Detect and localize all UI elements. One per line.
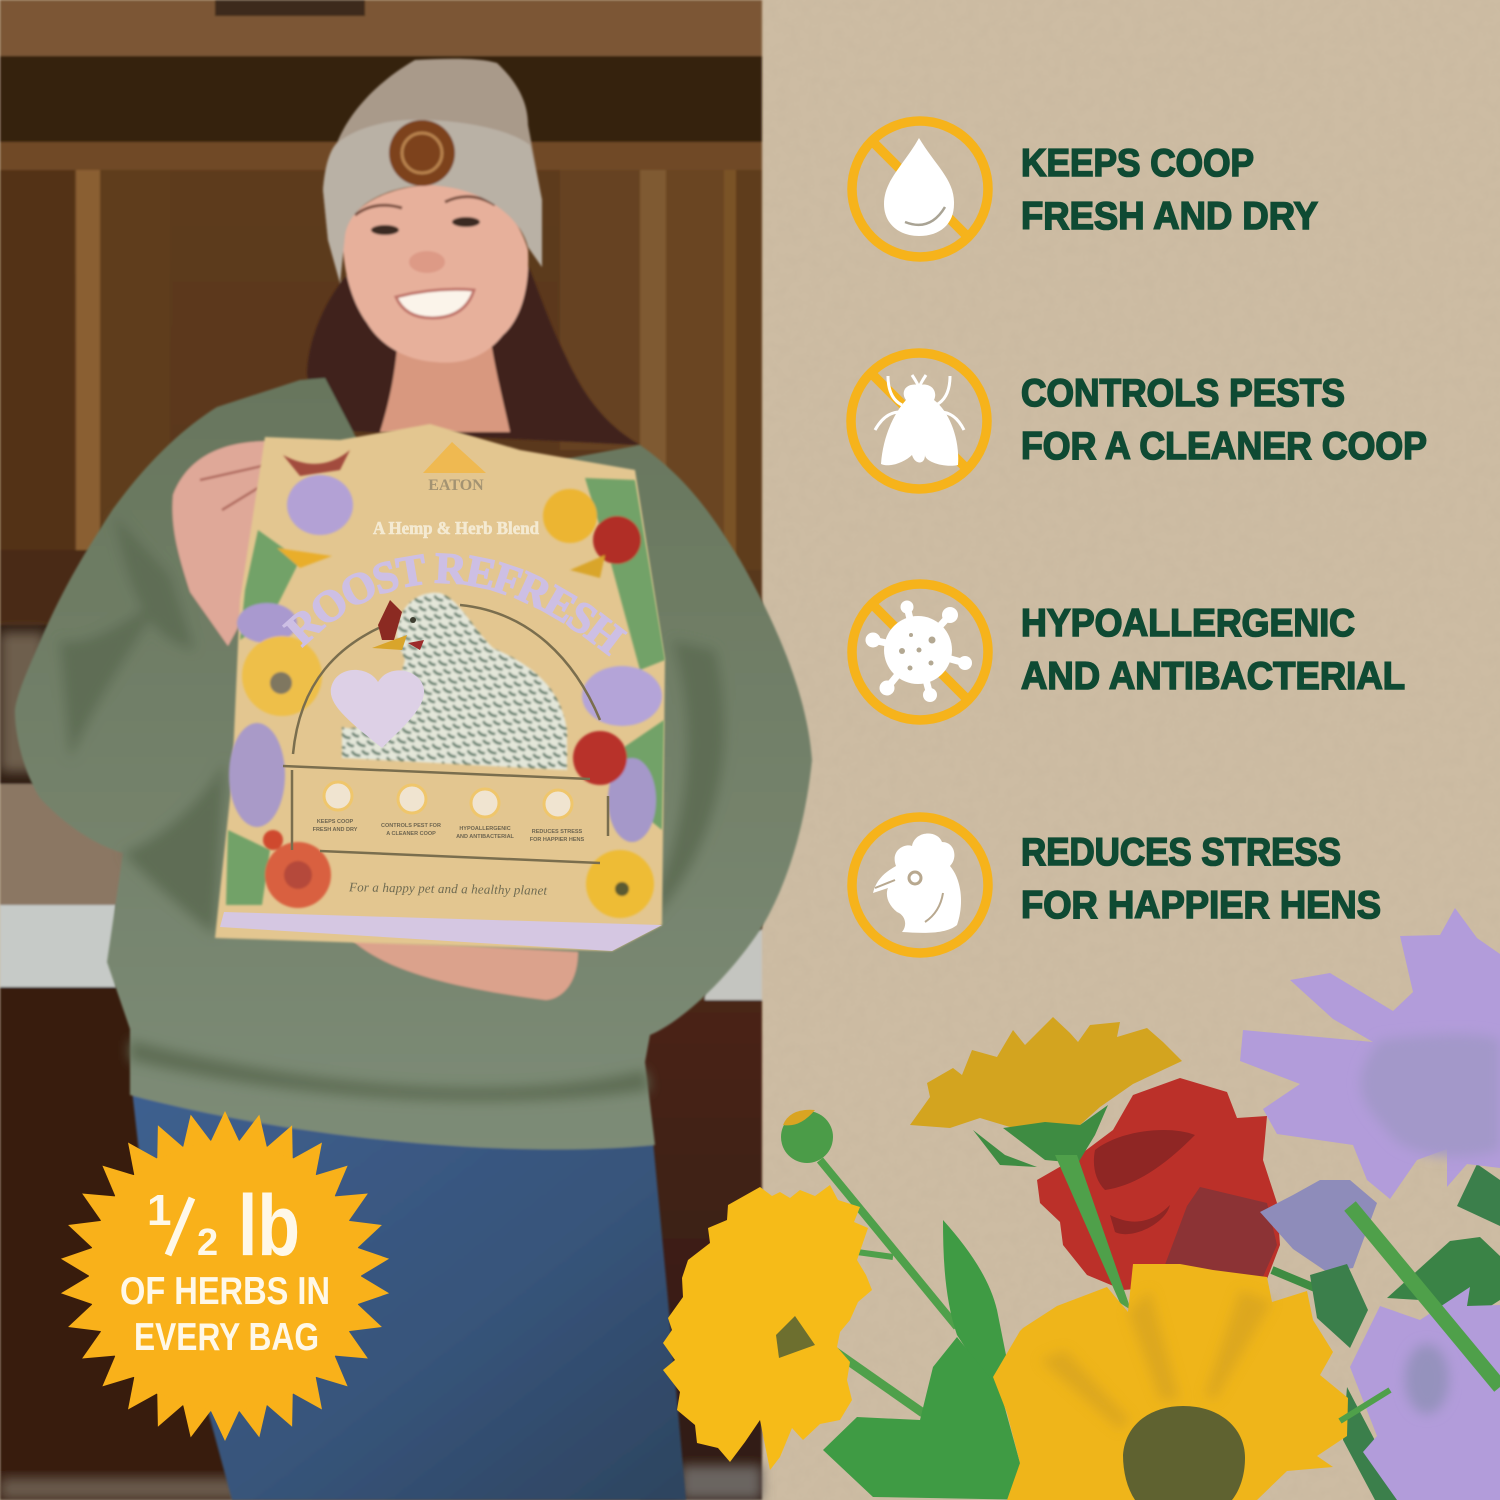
stems over purple — [1340, 1206, 1500, 1421]
bag logo — [423, 442, 486, 473]
benefit: reduces stress — [852, 817, 1381, 953]
bag chicken comb and beak — [372, 600, 424, 650]
hat patch — [389, 120, 455, 186]
bag chicken — [342, 593, 567, 770]
badge text: OF HERBS IN — [120, 1270, 330, 1313]
bag benefit labels: REDUCES STRESS — [532, 829, 583, 835]
text — [1021, 372, 1427, 468]
icon: no fly — [851, 353, 987, 489]
paper panel — [762, 0, 1500, 1500]
yellow flower calyx and stem — [1003, 1105, 1131, 1310]
flower center bottom — [1123, 1406, 1245, 1500]
sweatshirt — [15, 378, 812, 1149]
upper hand — [172, 441, 285, 646]
green bud under purple flower — [1310, 1264, 1368, 1348]
product bag: EATON — [428, 477, 484, 494]
photo: woman holding bag in barn — [0, 0, 814, 1500]
bag benefit labels: A CLEANER COOP — [386, 831, 436, 837]
bag arch — [283, 605, 608, 863]
starburst — [59, 1111, 391, 1441]
product bag — [214, 423, 666, 952]
jeans — [130, 1072, 686, 1500]
purple flower top right — [1240, 908, 1500, 1199]
icon: green bud — [781, 1110, 833, 1163]
bag benefit labels: KEEPS COOP — [317, 819, 354, 825]
yellow flower left — [663, 1185, 872, 1470]
bag benefit labels: CONTROLS PEST FOR — [381, 823, 441, 829]
bag heart — [331, 670, 424, 748]
bag title — [302, 583, 620, 665]
nose — [409, 251, 445, 273]
bag tagline: A Hemp & Herb Blend — [373, 518, 539, 538]
bag side florals — [226, 450, 665, 918]
bag benefit labels: AND ANTIBACTERIAL — [456, 834, 515, 840]
benefit: hypoallergenic — [852, 584, 1405, 720]
stems and leaves — [820, 1130, 1500, 1500]
bag benefit labels: FOR HAPPIER HENS — [530, 837, 585, 843]
text: HYPOALLERGENIC — [1021, 602, 1355, 645]
hat — [323, 59, 542, 283]
badge text: 2 — [197, 1222, 218, 1264]
text: AND ANTIBACTERIAL — [1021, 655, 1405, 698]
text: CONTROLS PESTS — [1021, 372, 1345, 415]
flower center left — [776, 1316, 815, 1358]
text: REDUCES STRESS — [1021, 831, 1341, 874]
icon: no water drop — [852, 121, 988, 257]
text: KEEPS COOP — [1021, 142, 1254, 185]
yellow flower top — [910, 1017, 1182, 1130]
eyes — [371, 225, 399, 235]
smile — [396, 289, 474, 318]
badge text — [120, 1178, 330, 1359]
product bag: ROOST REFRESH — [282, 552, 628, 656]
barn background — [0, 0, 762, 1500]
icon: no germ — [852, 584, 988, 720]
person — [15, 59, 812, 1500]
text: FRESH AND DRY — [1021, 195, 1318, 238]
flower illustration — [663, 908, 1500, 1500]
text — [1021, 602, 1405, 698]
badge text: 1 — [147, 1186, 171, 1235]
text: FOR HAPPIER HENS — [1021, 884, 1381, 927]
sweatshirt shadows — [60, 513, 725, 1101]
text — [1021, 142, 1318, 238]
text: FOR A CLEANER COOP — [1021, 425, 1427, 468]
starburst badge — [59, 1111, 391, 1441]
face — [343, 185, 528, 363]
purple flower small — [1260, 1180, 1377, 1272]
bag lavender strip — [220, 912, 662, 951]
bag benefit labels — [313, 819, 585, 843]
badge text: EVERY BAG — [134, 1316, 319, 1359]
neck — [380, 335, 510, 432]
yellow flower bottom — [993, 1264, 1348, 1500]
hair — [307, 265, 640, 445]
bag body — [215, 424, 665, 951]
icon: hen head — [852, 817, 988, 953]
badge text: lb — [238, 1178, 300, 1274]
benefit: controls pests — [851, 353, 1427, 489]
text — [1021, 831, 1381, 927]
lower hand — [352, 940, 578, 1000]
flower bottom shading — [1040, 1290, 1272, 1430]
red rose — [1037, 1078, 1280, 1290]
bag benefit labels: FRESH AND DRY — [313, 827, 358, 833]
bag benefit circles — [324, 782, 572, 818]
bag benefit labels: HYPOALLERGENIC — [459, 826, 511, 832]
benefit: keeps coop fresh and dry — [852, 121, 1318, 257]
bag slogan: For a happy pet and a healthy planet — [348, 879, 548, 898]
purple flower bottom right — [1350, 1287, 1500, 1500]
